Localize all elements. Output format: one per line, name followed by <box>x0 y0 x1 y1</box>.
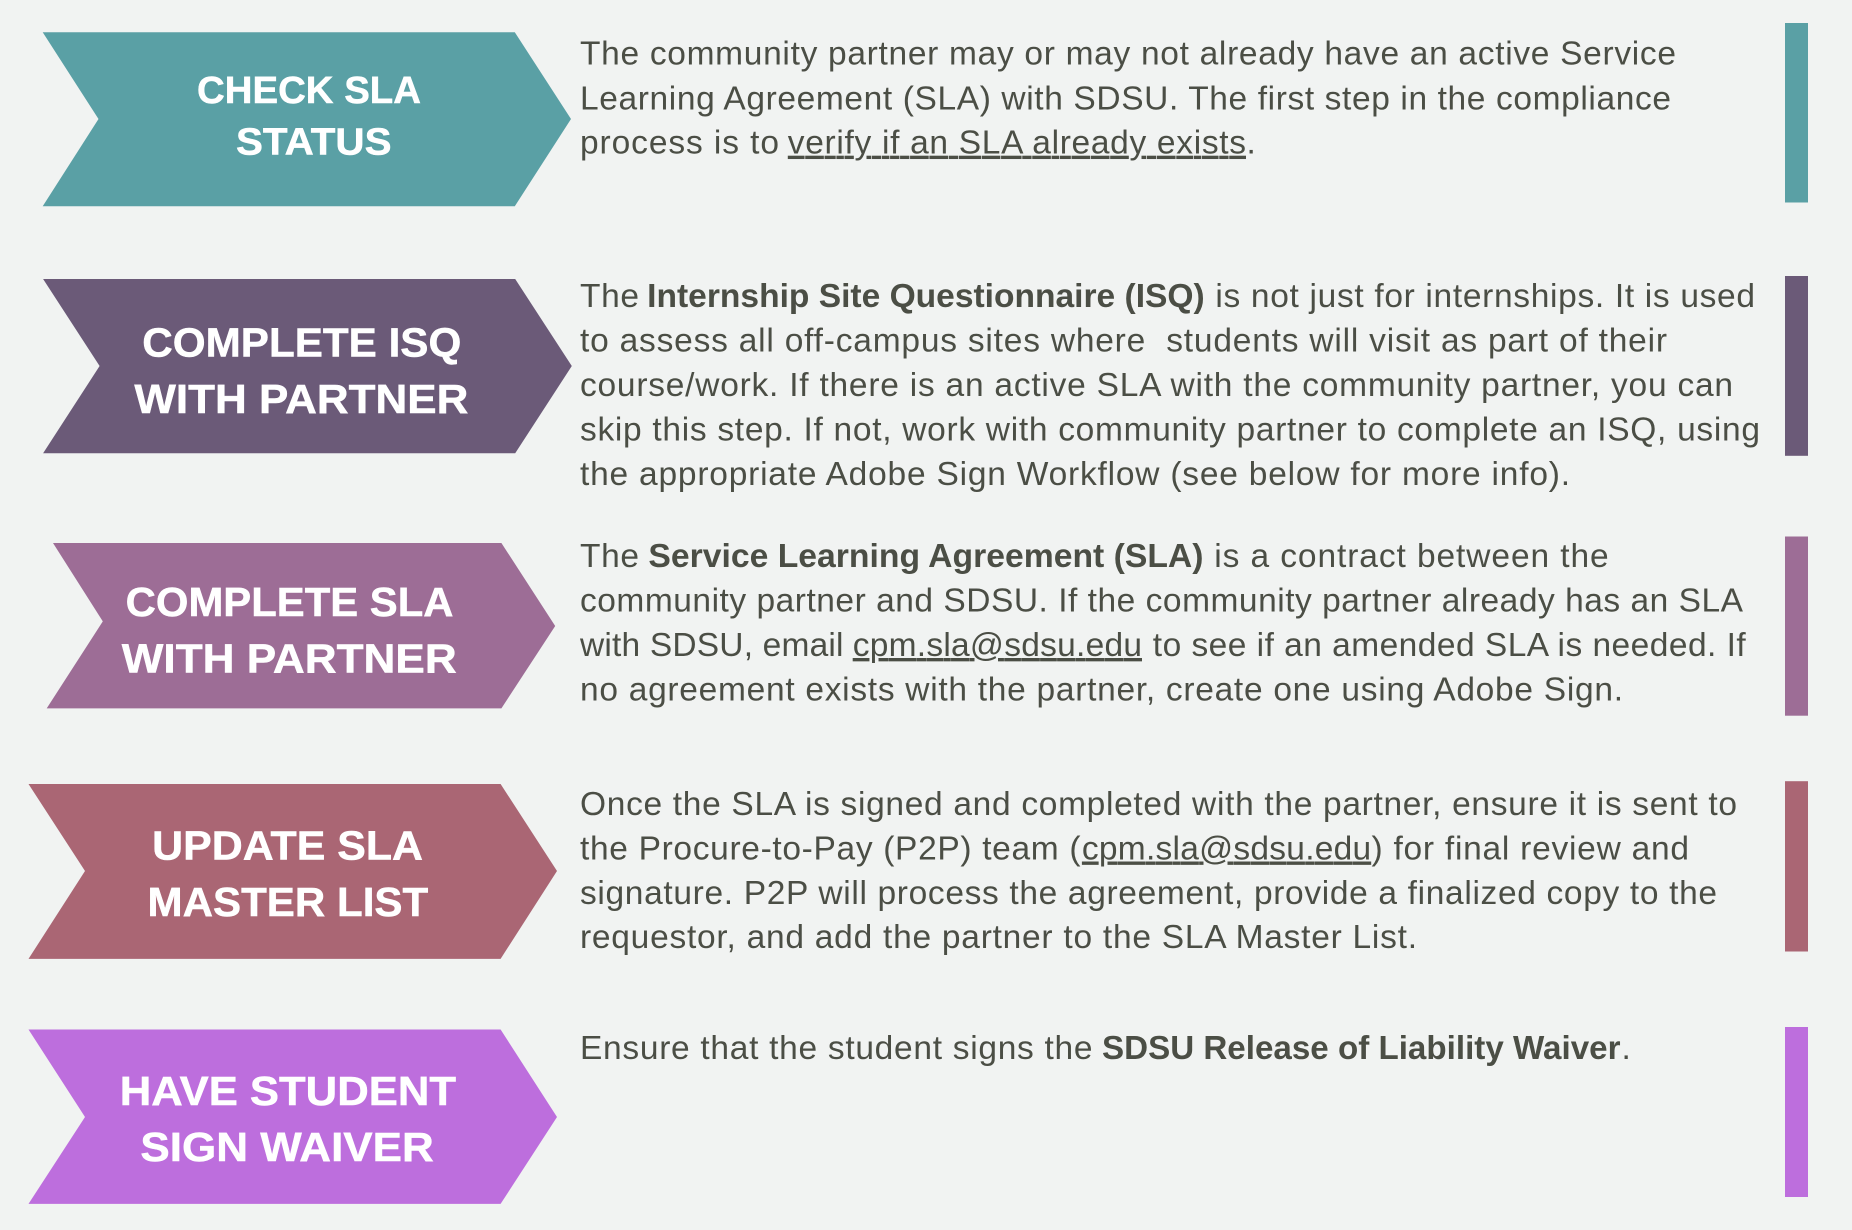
heading: complete SLA with partner: COMPLETE SLA <box>126 579 453 625</box>
heading: have student sign waiver <box>120 1068 456 1170</box>
heading: complete SLA with partner: WITH PARTNER <box>122 635 457 681</box>
panel: step 2 complete ISQ with partner <box>43 276 1808 493</box>
arrow: update SLA master list <box>28 784 557 959</box>
panel: step 4 update SLA master list <box>28 781 1808 959</box>
arrow: have student sign waiver <box>28 1030 557 1204</box>
heading: have student sign waiver: HAVE STUDENT <box>120 1068 456 1114</box>
bar: mauve accent <box>1785 536 1808 716</box>
text block: have student sign waiver: SDSU Release of Liability Waiver <box>1102 1030 1620 1067</box>
arrow: complete SLA <box>47 543 555 708</box>
panel: step 3 complete SLA with partner <box>47 536 1808 716</box>
text block: complete ISQ: skip this step. If not, work with community partner to complete an ISQ, using <box>580 412 1760 448</box>
text block: complete ISQ: course/work. If there is an active SLA with the community partner, you can <box>580 367 1733 404</box>
panel: step 1 check SLA status <box>43 23 1808 206</box>
heading: check SLA status: STATUS <box>236 121 392 163</box>
text block: check SLA status: Learning Agreement (SLA) with SDSU. The first step in the compliance <box>580 80 1671 117</box>
text block: check SLA status <box>580 35 1676 162</box>
text block: complete SLA: community partner and SDSU. If the community partner already has an SLA <box>580 582 1744 620</box>
text block: check SLA status: process is to <box>580 125 779 162</box>
text block: check SLA status: verify if an SLA already exists <box>788 125 1246 162</box>
text block: complete SLA: The <box>580 538 639 575</box>
heading: update SLA master list: MASTER LIST <box>148 879 428 925</box>
heading: complete ISQ with partner: WITH PARTNER <box>134 376 468 422</box>
text block: complete SLA: with SDSU, email <box>579 627 844 664</box>
text block: complete SLA: to see if an amended SLA is needed. If <box>1153 627 1746 664</box>
arrow: complete ISQ <box>43 279 572 453</box>
text block: complete ISQ: Internship Site Questionnaire (ISQ) <box>647 278 1205 315</box>
text block: complete ISQ: the appropriate Adobe Sign Workflow (see below for more info). <box>580 456 1570 493</box>
bar: purple accent <box>1785 276 1808 456</box>
bar: teal accent <box>1785 23 1808 202</box>
heading: complete ISQ with partner <box>134 320 468 422</box>
text block: update SLA master list: requestor, and add the partner to the SLA Master List. <box>580 919 1417 956</box>
heading: check SLA status <box>197 70 421 163</box>
text block: complete ISQ: The <box>580 278 639 315</box>
text block: update SLA master list: cpm.sla@sdsu.edu <box>1082 830 1371 868</box>
text block: update SLA master list: the Procure-to-Pay (P2P) team ( <box>580 830 1080 868</box>
bar: orchid accent <box>1785 1027 1808 1197</box>
heading: have student sign waiver: SIGN WAIVER <box>140 1124 434 1170</box>
text block: complete ISQ <box>580 278 1760 493</box>
arrow: check SLA status <box>43 32 571 206</box>
heading: update SLA master list <box>148 823 428 925</box>
text block: update SLA master list: Once the SLA is signed and completed with the partner, ensure it is sent to <box>580 786 1737 823</box>
heading: check SLA status: CHECK SLA <box>197 70 421 112</box>
bar: rose accent <box>1785 781 1808 952</box>
heading: complete SLA with partner <box>122 579 457 681</box>
text block: complete SLA: is a contract between the <box>1214 538 1609 575</box>
text block: complete ISQ: to assess all off-campus sites where students will visit as part of their <box>580 322 1667 360</box>
text block: update SLA master list: ) for final review and <box>1372 830 1689 868</box>
text block: complete SLA: Service Learning Agreement (SLA) <box>648 538 1204 575</box>
heading: complete ISQ with partner: COMPLETE ISQ <box>142 320 461 366</box>
text block: complete ISQ: is not just for internships. It is used <box>1215 278 1755 315</box>
text block: have student sign waiver <box>580 1030 1631 1067</box>
text block: check SLA status: . <box>1246 125 1256 162</box>
text block: update SLA master list: signature. P2P will process the agreement, provide a finalized copy to the <box>580 875 1717 912</box>
text block: complete SLA: cpm.sla@sdsu.edu <box>853 627 1142 664</box>
panel: step 5 have student sign waiver <box>28 1027 1808 1204</box>
text block: have student sign waiver: Ensure that the student signs the <box>580 1030 1092 1067</box>
text block: complete SLA: no agreement exists with the partner, create one using Adobe Sign. <box>580 672 1623 708</box>
text block: check SLA status: The community partner may or may not already have an active Service <box>580 35 1676 72</box>
heading: update SLA master list: UPDATE SLA <box>152 823 423 869</box>
text block: update SLA master list <box>580 786 1737 956</box>
text block: complete SLA <box>579 538 1746 708</box>
text block: have student sign waiver: . <box>1622 1030 1631 1067</box>
